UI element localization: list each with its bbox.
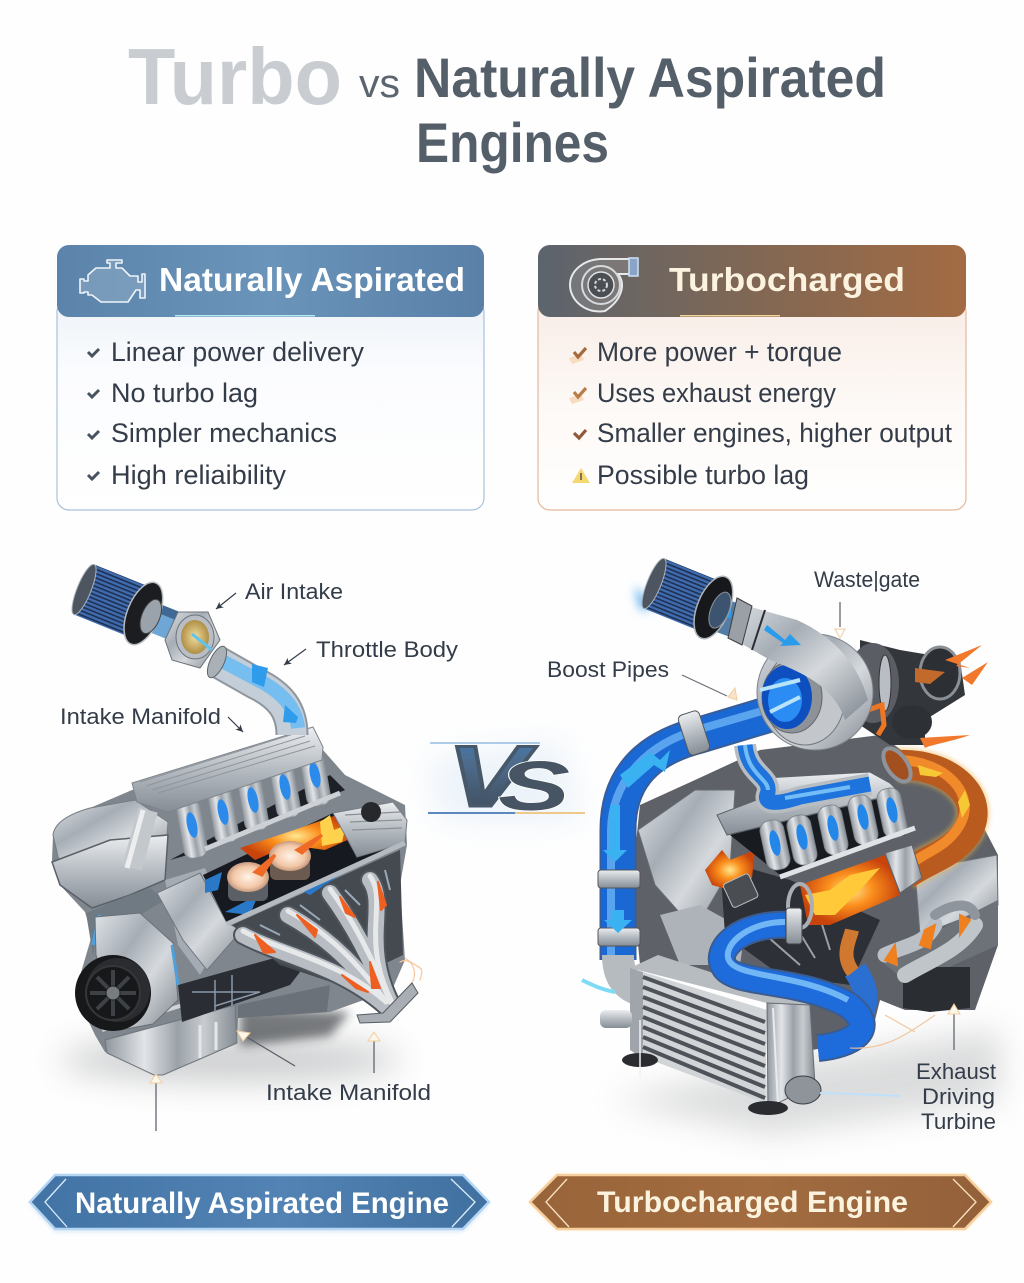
light streaks	[582, 980, 935, 1096]
list: turbocharged benefits: Uses exhaust energy	[597, 378, 836, 408]
banner: naturally aspirated engine: Naturally Aspirated Engine	[75, 1187, 449, 1220]
hot exhaust arrows	[920, 645, 988, 748]
list: turbocharged benefits	[569, 337, 952, 490]
lower headers	[885, 906, 975, 975]
icon: engine outline	[80, 260, 145, 302]
banner: turbocharged engine	[530, 1175, 991, 1229]
engine silhouette	[52, 750, 407, 1075]
timing cover	[95, 913, 178, 1030]
list: naturally aspirated benefits	[88, 337, 364, 490]
title	[128, 32, 886, 174]
dark engine detail	[720, 860, 880, 985]
heading: naturally aspirated: Naturally Aspirated	[159, 261, 465, 298]
intake manifold	[132, 727, 323, 812]
flames	[240, 812, 352, 860]
blue intake duct	[745, 745, 870, 802]
label: air intake	[216, 579, 343, 609]
air flow arrows	[252, 664, 298, 723]
inlet pipe	[703, 593, 868, 720]
throttle body	[165, 612, 231, 680]
turbine housing	[847, 640, 965, 745]
air filter turbo	[626, 547, 741, 644]
label: throttle body: Throttle Body	[316, 637, 458, 662]
blue charge pipe	[722, 922, 865, 1048]
flow arrows in blue pipe	[603, 750, 670, 933]
list: turbocharged benefits: More power + torque	[597, 337, 842, 367]
oil pan	[105, 1005, 237, 1075]
banner: turbocharged engine: Turbocharged Engine	[597, 1186, 908, 1219]
back housing	[53, 800, 168, 865]
list: naturally aspirated benefits: Linear power delivery	[111, 337, 364, 367]
title: Naturally Aspirated	[414, 46, 886, 109]
label: boost pipes: Boost Pipes	[547, 657, 669, 682]
label: intake manifold bottom	[150, 1031, 431, 1131]
label: air intake: Air Intake	[245, 579, 343, 604]
heading: turbocharged: Turbocharged	[669, 261, 905, 298]
list: naturally aspirated benefits: No turbo lag	[111, 378, 258, 408]
list: naturally aspirated benefits: Simpler mechanics	[111, 418, 337, 448]
lower block	[165, 868, 230, 975]
icon: turbocharger	[570, 258, 638, 311]
exhaust catalytic flame cylinder	[788, 845, 922, 928]
label: exhaust driving turbine: Driving	[922, 1084, 995, 1109]
panel: naturally aspirated	[57, 245, 484, 510]
title: Engines	[416, 111, 609, 174]
title: Turbo	[128, 32, 342, 121]
air filter	[65, 556, 215, 668]
right block	[915, 855, 998, 935]
lower rail	[227, 843, 405, 924]
charge pipe into turbo	[611, 700, 800, 960]
exhaust headers	[243, 876, 422, 1006]
crankcase	[178, 955, 300, 1022]
label: boost pipes	[547, 657, 737, 700]
banner: naturally aspirated engine	[30, 1175, 489, 1232]
list: turbocharged benefits: Possible turbo lag	[597, 460, 809, 490]
central plate	[157, 873, 242, 970]
cutaway window	[203, 813, 405, 923]
list: turbocharged benefits: Smaller engines, higher output	[597, 418, 952, 448]
pistons	[227, 835, 322, 901]
left block	[638, 790, 735, 930]
label: intake manifold bottom: Intake Manifold	[266, 1080, 431, 1105]
label: intake manifold top: Intake Manifold	[60, 704, 221, 729]
engine silhouette	[632, 735, 998, 1050]
vs badge: V	[447, 729, 537, 825]
bolt and fittings	[786, 908, 802, 944]
valve cover	[333, 802, 407, 857]
engine: naturally aspirated	[52, 556, 422, 1082]
pipe bend to intercooler	[618, 955, 640, 990]
orange exhaust pipe	[897, 760, 973, 875]
air intake pipe	[218, 662, 298, 735]
intercooler	[600, 955, 821, 1115]
pipe clamps	[598, 710, 711, 946]
panel: turbocharged	[538, 245, 966, 510]
label: exhaust driving turbine	[916, 1004, 996, 1134]
vs badge	[428, 729, 585, 825]
left flames	[705, 850, 755, 890]
label: wastegate: Waste|gate	[814, 567, 920, 592]
label: exhaust driving turbine: Exhaust	[916, 1059, 996, 1084]
label: exhaust driving turbine: Turbine	[921, 1109, 996, 1134]
engine: turbocharged	[582, 547, 1000, 1135]
dark area behind headers	[232, 850, 403, 985]
label: wastegate	[814, 567, 920, 638]
list: naturally aspirated benefits: High reliaibility	[111, 460, 286, 490]
intake runners	[127, 746, 345, 868]
title: vs	[359, 62, 400, 106]
manifold plate	[717, 772, 900, 835]
vs badge: S	[498, 747, 570, 825]
turbo compressor	[757, 634, 873, 750]
crank pulley	[75, 955, 151, 1031]
intake runners	[730, 786, 915, 877]
label: throttle body	[284, 637, 458, 665]
